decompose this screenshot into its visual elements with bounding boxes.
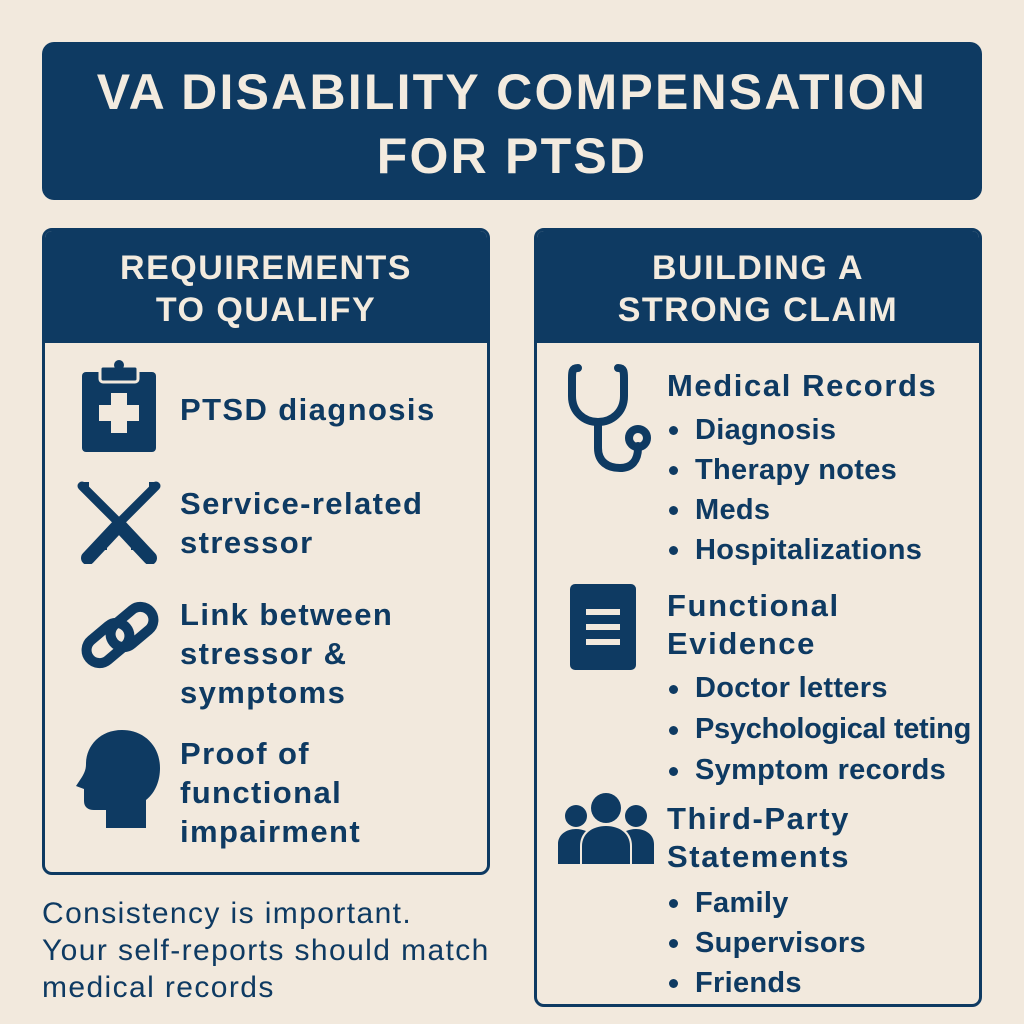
list: third-party: Family [695, 887, 789, 919]
text: functional evidence: Functional [667, 588, 840, 623]
text: service stressor: stressor [180, 525, 314, 560]
list: third-party: Friends [695, 967, 802, 999]
panel: building a claim [534, 228, 982, 1007]
text: functional evidence [667, 588, 840, 661]
list: functional evidence: Doctor letters [695, 672, 888, 704]
text: functional evidence: Evidence [667, 626, 816, 661]
heading: building: STRONG CLAIM [618, 291, 898, 329]
heading: requirements: REQUIREMENTS [120, 249, 412, 287]
footer note: Consistency is important. [42, 897, 412, 930]
icon: chain link [82, 602, 158, 668]
text: medical records: Medical Records [667, 368, 937, 403]
list: medical records: Diagnosis [695, 414, 836, 446]
list: functional evidence: Psychological teting [695, 713, 971, 745]
footer note [42, 897, 490, 1004]
text: third-party [667, 801, 850, 874]
text: PTSD diagnosis: PTSD diagnosis [180, 392, 436, 427]
list: functional evidence [669, 672, 971, 786]
icon: clipboard [82, 360, 156, 452]
panel: requirements [42, 228, 490, 875]
text: link: Link between [180, 597, 393, 632]
icon: document [570, 584, 636, 670]
footer note: medical records [42, 971, 275, 1004]
text: service stressor [180, 486, 423, 560]
title [42, 42, 982, 200]
text: proof [180, 736, 361, 849]
icon: crossed rifles [78, 482, 160, 564]
text: proof: impairment [180, 814, 361, 849]
list: third-party [669, 887, 866, 999]
title: VA DISABILITY COMPENSATION [97, 64, 927, 120]
icon: head [76, 730, 160, 828]
list: third-party: Supervisors [695, 927, 866, 959]
text: link: stressor & [180, 636, 347, 671]
list: medical records [669, 414, 922, 566]
list: functional evidence: Symptom records [695, 754, 946, 786]
text: third-party: Statements [667, 839, 850, 874]
text: third-party: Third-Party [667, 801, 850, 836]
text: link: symptoms [180, 675, 346, 710]
heading: building [537, 231, 979, 343]
title: FOR PTSD [377, 128, 647, 184]
list: medical records: Therapy notes [695, 454, 897, 486]
text: proof: Proof of [180, 736, 310, 771]
list: medical records: Hospitalizations [695, 534, 922, 566]
footer note: Your self-reports should match [42, 934, 490, 967]
icon: stethoscope [568, 364, 651, 472]
list: medical records: Meds [695, 494, 770, 526]
icon: people [558, 793, 654, 864]
text: proof: functional [180, 775, 342, 810]
heading: requirements [45, 231, 487, 343]
heading: building: BUILDING A [652, 249, 864, 287]
text: service stressor: Service-related [180, 486, 423, 521]
text: link [180, 597, 393, 710]
heading: requirements: TO QUALIFY [156, 291, 376, 329]
